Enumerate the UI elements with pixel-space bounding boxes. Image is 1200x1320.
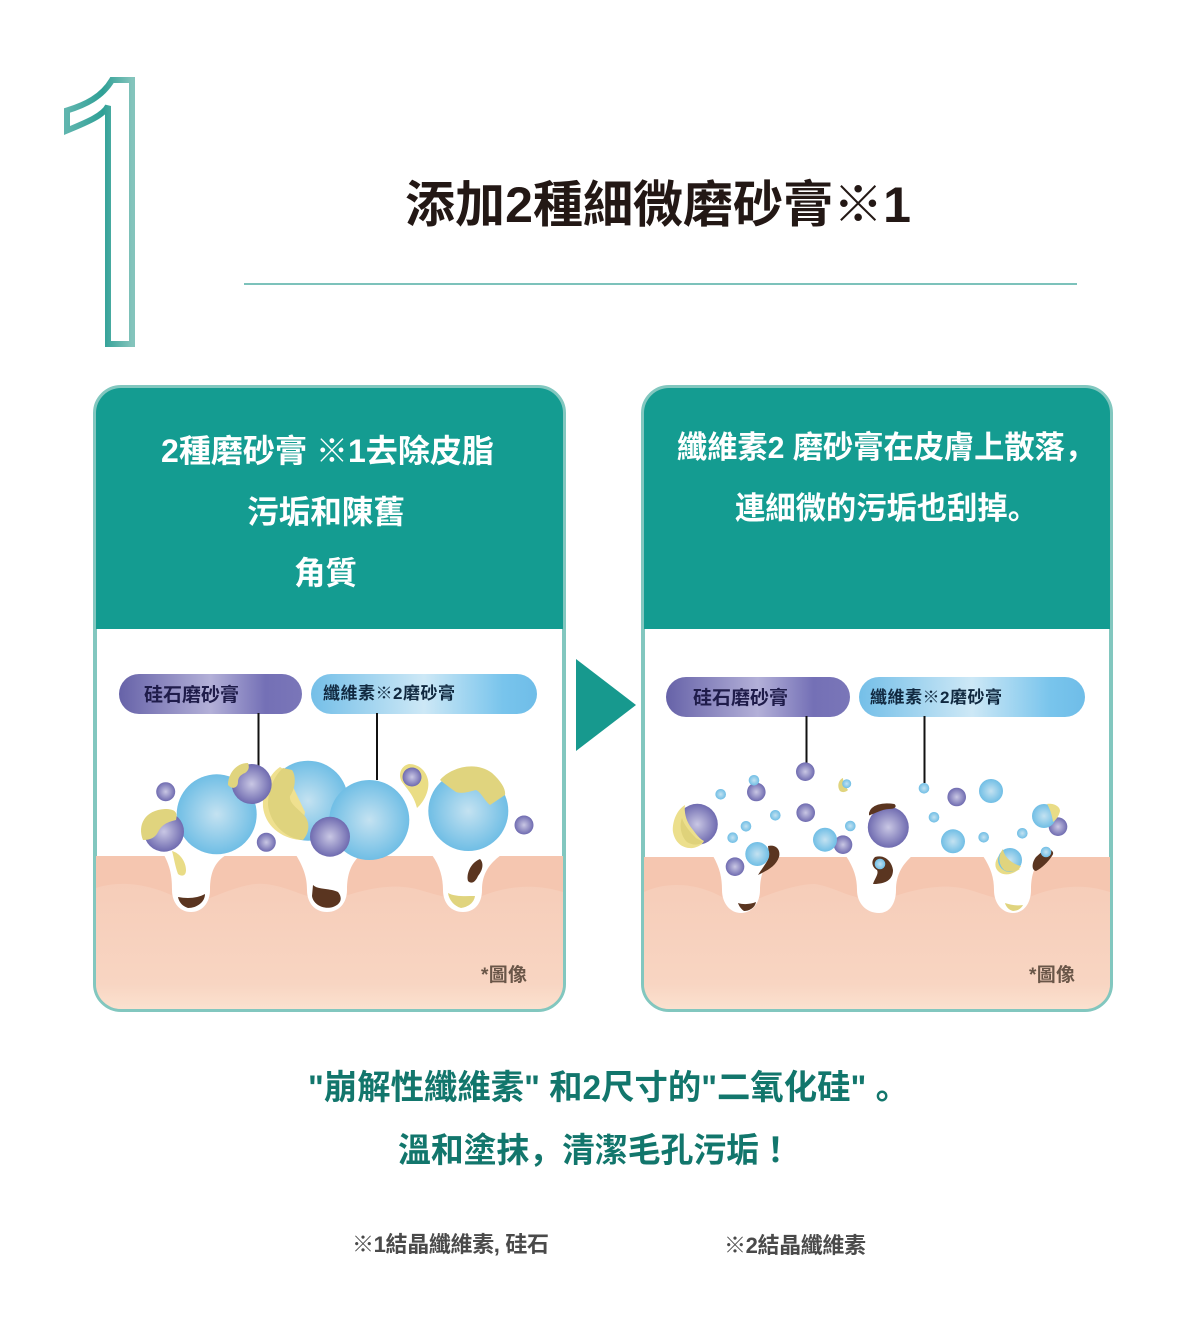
right panel heading text <box>677 430 1095 526</box>
summary text: 溫和塗抹，清潔毛孔污垢 <box>398 1132 759 1170</box>
left panel heading text <box>161 433 494 591</box>
label pill: silica scrub <box>119 674 302 714</box>
image note: *圖像 <box>481 964 527 986</box>
footnotes <box>352 1232 866 1258</box>
label pill: silica scrub: 硅石磨砂膏 <box>144 683 239 706</box>
summary text: "崩解性纖維素" 和2尺寸的"二氧化硅" 。 <box>308 1069 909 1107</box>
leader lines <box>258 713 377 780</box>
label pill: silica scrub <box>666 677 850 717</box>
right skin cross-section <box>644 856 1110 1009</box>
label pill: cellulose scrub <box>859 677 1085 717</box>
left skin cross-section <box>96 855 563 1009</box>
leader lines <box>806 716 924 783</box>
right panel heading text: 連細微的污垢也刮掉。 <box>735 491 1038 526</box>
panel: right, after <box>643 387 1111 1010</box>
title: 添加2種細微磨砂膏※1 <box>405 177 911 233</box>
image note: *圖像 <box>1029 964 1075 986</box>
arrow between panels <box>576 659 636 751</box>
panel: left, before <box>95 387 564 1010</box>
left illustration: scrub particles and dirt <box>141 761 534 908</box>
large outlined numeral 1 <box>67 80 132 344</box>
label pill: cellulose scrub: 纖維素※2磨砂膏 <box>870 687 1002 707</box>
label pill: silica scrub: 硅石磨砂膏 <box>693 686 788 709</box>
right illustration: dispersed particles and dirt <box>673 762 1067 911</box>
left panel heading text: 污垢和陳舊 <box>247 494 405 530</box>
right panel heading text: 纖維素2 磨砂膏在皮膚上散落， <box>677 430 1095 465</box>
footnotes: ※2結晶纖維素 <box>724 1233 866 1258</box>
footnotes: ※1結晶纖維素, 硅石 <box>352 1232 549 1257</box>
right panel teal header <box>644 388 1110 629</box>
left panel heading text: 2種磨砂膏 ※1去除皮脂 <box>161 433 494 469</box>
left panel teal header <box>96 388 563 629</box>
left panel heading text: 角質 <box>294 555 357 591</box>
summary text: ！ <box>767 1132 801 1170</box>
label pill: cellulose scrub <box>311 674 537 714</box>
label pill: cellulose scrub: 纖維素※2磨砂膏 <box>323 683 455 703</box>
summary text <box>308 1069 909 1170</box>
